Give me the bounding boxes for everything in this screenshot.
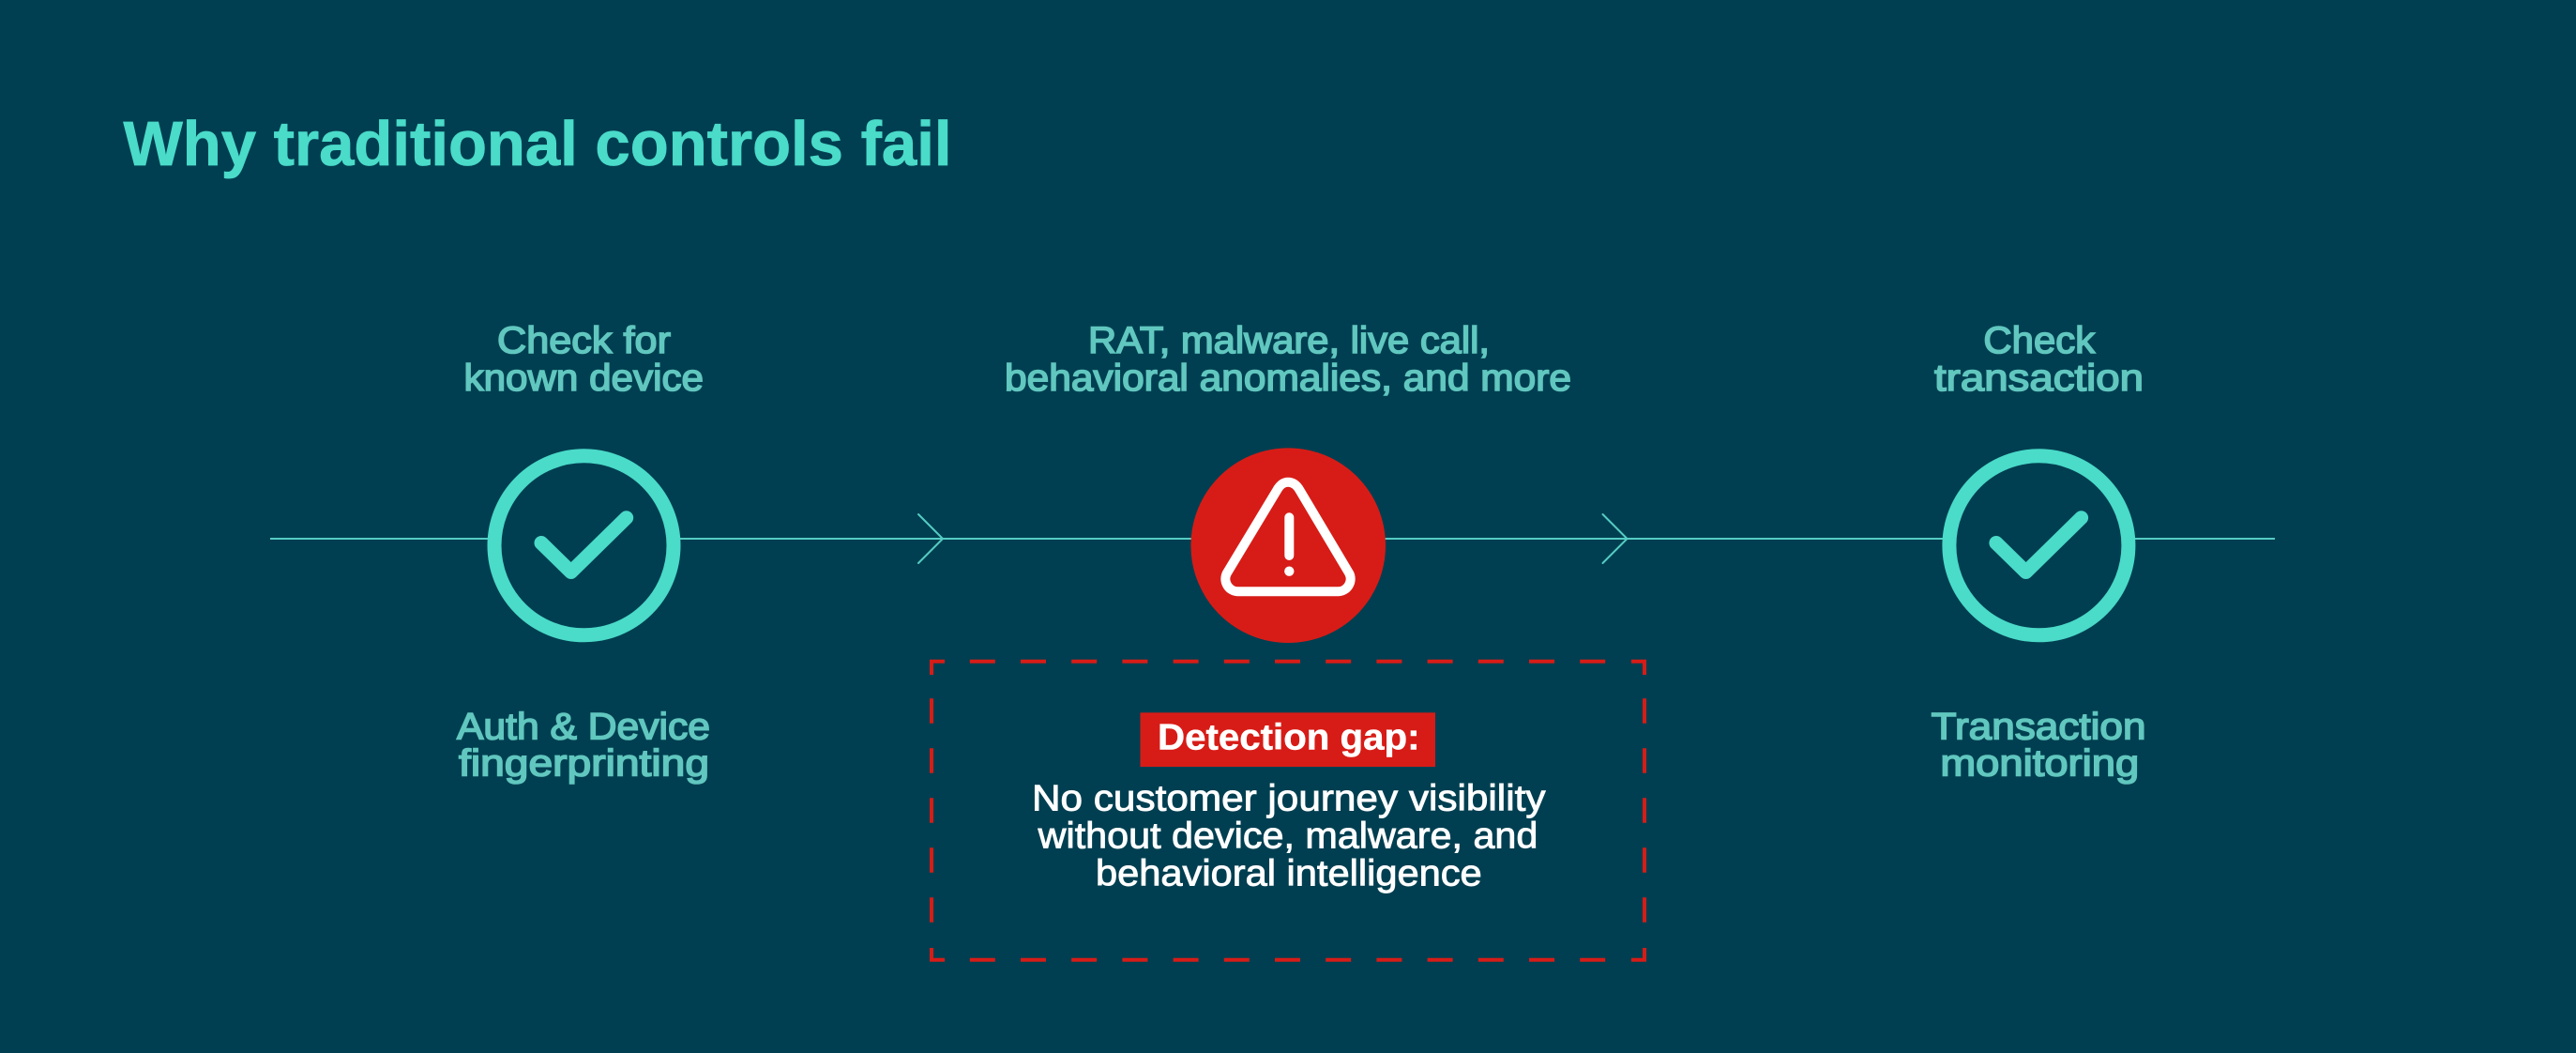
callout body text: No customer journey visibility <box>1032 778 1546 818</box>
step 3 top label <box>1934 320 2144 399</box>
callout body text: behavioral intelligence <box>1096 853 1482 893</box>
dashed red border <box>932 662 1644 960</box>
icon: red warning circle <box>1190 448 1386 643</box>
step 1 top label <box>463 320 704 399</box>
flow line with arrows <box>270 514 2275 563</box>
callout body text: without device, malware, and <box>1038 816 1538 856</box>
step 1 top label: Check for <box>497 320 671 361</box>
panel: detection gap callout <box>932 662 1644 960</box>
step 3 bottom label <box>1932 706 2146 785</box>
icon: teal check circle <box>494 456 674 635</box>
step 3: transaction check <box>1932 320 2146 785</box>
title: Why traditional controls fail <box>124 109 951 179</box>
step 3 bottom label: monitoring <box>1940 743 2139 785</box>
detection gap badge <box>1141 712 1435 767</box>
step 3 bottom label: Transaction <box>1932 706 2146 747</box>
step 3 top label: Check <box>1983 320 2096 361</box>
step 1 bottom label: fingerprinting <box>459 743 709 785</box>
arrow: second chevron <box>1602 514 1627 563</box>
step 2 top label <box>1005 320 1571 399</box>
callout body text <box>1032 778 1546 893</box>
step 1 top label: known device <box>463 358 704 399</box>
step 2 top label: RAT, malware, live call, <box>1088 320 1490 361</box>
arrow: first chevron <box>918 514 943 563</box>
step 1 bottom label: Auth & Device <box>457 706 710 747</box>
step 2: undetected threats <box>1005 320 1571 643</box>
icon: teal check circle <box>1949 456 2129 635</box>
step 1: known device check <box>457 320 710 785</box>
step 1 bottom label <box>457 706 710 785</box>
step 3 top label: transaction <box>1934 358 2144 399</box>
detection gap badge: Detection gap: <box>1158 717 1420 757</box>
step 2 top label: behavioral anomalies, and more <box>1005 358 1571 399</box>
